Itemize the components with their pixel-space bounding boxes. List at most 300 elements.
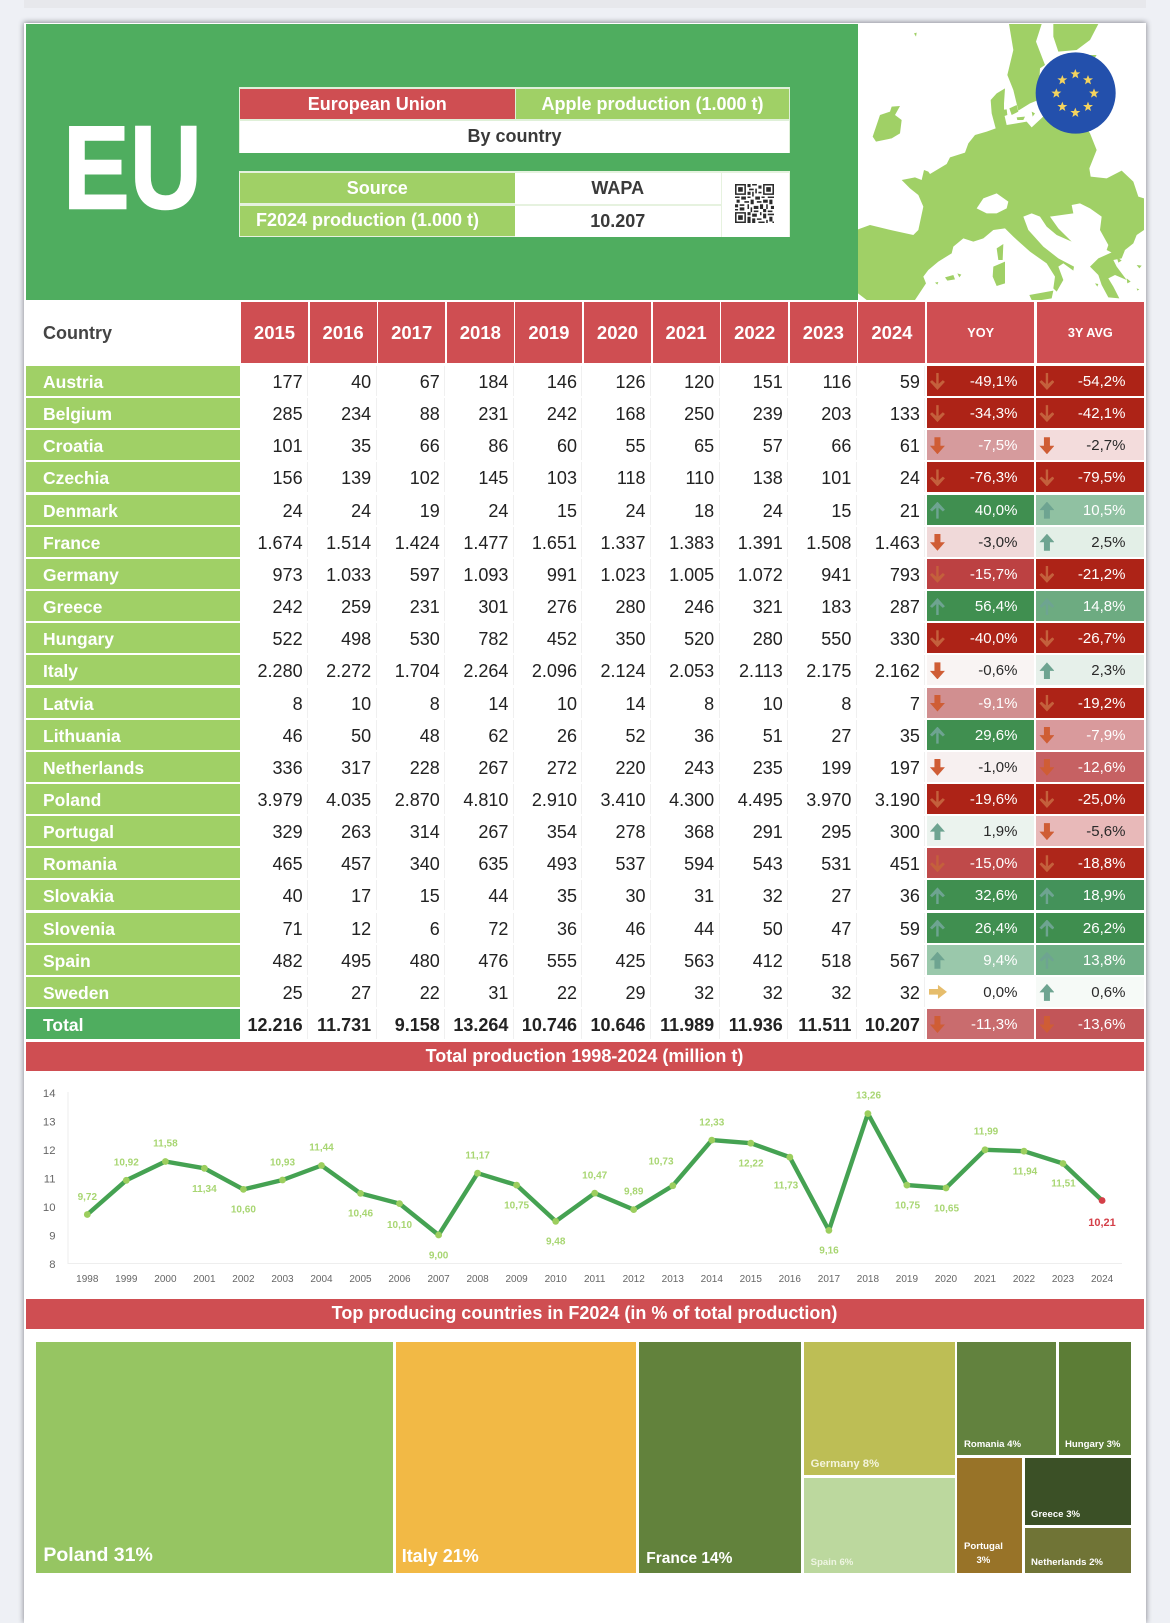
row: Denmark [26,495,1144,525]
3Y Total [1036,1009,1144,1039]
row: Czechia: 110 [685,468,714,488]
row: Belgium: 234 [341,404,371,424]
row: Austria: 146 [547,372,577,392]
x axis year labels: 2018 [857,1274,879,1285]
row: Total: 9.158 [395,1015,440,1035]
YOY Belgium [927,398,1034,428]
value: 10.207 [515,206,720,236]
tile: Portugal [957,1458,1022,1573]
3Y Czechia: -79,5% [1078,469,1125,486]
row: Croatia: 65 [694,436,714,456]
row: Greece: 246 [684,597,714,617]
icon: QR code [735,184,774,223]
row: France: 1.337 [601,533,646,553]
row: Lithuania: Lithuania [43,726,121,746]
row: Netherlands: 267 [478,758,508,778]
row: Sweden: 32 [900,983,920,1003]
label: Source: Source [347,178,408,198]
row: Sweden: 29 [626,983,646,1003]
3Y France: 2,5% [1091,534,1125,551]
YOY Latvia: -9,1% [978,694,1017,712]
table header: 2022 [721,302,788,363]
tile: Spain [804,1478,955,1573]
heading: Total production [26,1042,1144,1071]
YOY Belgium: -34,3% [970,405,1017,422]
table header: 2021 [653,302,720,363]
x axis year labels: 2005 [349,1274,372,1285]
table header: 2015 [241,302,308,363]
YOY Poland: -19,6% [970,791,1017,808]
3Y Romania [1036,848,1144,878]
label: Source [240,173,514,203]
heading: Top producing countries: Top producing countries in F2024 (in % of total production) [332,1303,837,1323]
row: Hungary: 452 [547,629,577,649]
row: Czechia: 24 [900,468,920,488]
x axis year labels: 1999 [115,1274,138,1285]
YOY Slovakia: 32,6% [975,887,1017,904]
3Y Germany: -21,2% [1078,566,1125,583]
row: Lithuania: 35 [900,726,920,746]
QR code cell [722,173,789,236]
row: Italy: 2.280 [258,661,303,681]
x axis year labels: 2010 [545,1274,567,1285]
row: Poland: 4.300 [669,790,714,810]
row: Sweden [26,977,1144,1007]
row: Slovakia: 17 [351,886,371,906]
row: Denmark: 24 [488,501,508,521]
row: Lithuania: 48 [420,726,440,746]
row: Slovakia: 44 [488,886,508,906]
table header: 2016 [310,302,377,363]
row: Greece: 276 [547,597,577,617]
YOY Total: -11,3% [971,1016,1017,1033]
table header: 2019: 2019 [528,322,569,342]
row: Netherlands: 235 [753,758,783,778]
x axis year labels: 2016 [779,1274,801,1285]
heading: By country [240,120,789,152]
table header: Country: Country [43,323,112,343]
YOY Austria [927,366,1034,396]
row: Austria: 151 [753,372,783,392]
row: Slovakia: 32 [763,886,783,906]
data labels: 11,73 [774,1180,799,1192]
row: Sweden: 32 [831,983,851,1003]
row: Netherlands: 336 [273,758,303,778]
3Y Spain [1036,945,1144,975]
row: Romania: 594 [684,854,714,874]
row: Latvia: 8 [704,694,714,714]
row: Spain [26,945,1144,975]
heading: Total production: Total production 1998-2024 (million t) [426,1046,743,1066]
row: Poland: 2.870 [395,790,440,810]
YOY Portugal: 1,9% [983,823,1017,840]
row: Romania: 493 [547,854,577,874]
x axis year labels: 2000 [154,1274,177,1285]
table header: 2024 [858,302,925,363]
table header: 2020 [584,302,651,363]
row: Hungary: 520 [684,629,714,649]
row: Total: 11.936 [729,1015,783,1035]
row: Sweden: Sweden [43,983,109,1003]
row: Denmark: 19 [420,501,440,521]
row: Slovenia: 46 [626,919,646,939]
table header: 2016: 2016 [323,322,364,342]
row: Spain: 412 [753,951,783,971]
row: Slovakia [26,880,1144,910]
map of Europe with EU flag [858,24,1144,300]
table header: YOY [927,302,1034,363]
tile: Hungary: Hungary 3% [1065,1439,1120,1450]
tile: Romania: Romania 4% [964,1439,1021,1450]
row: Portugal: 368 [684,822,714,842]
data labels: 10,47 [582,1170,608,1182]
row: Spain: 518 [821,951,851,971]
row: Portugal [26,816,1144,846]
3Y Hungary [1036,623,1144,653]
YOY Greece: 56,4% [975,598,1017,615]
row: Romania: 465 [273,854,303,874]
3Y Slovenia: 26,2% [1083,920,1125,937]
row: Sweden: 27 [351,983,371,1003]
row: Netherlands [26,752,1144,782]
3Y Denmark: 10,5% [1083,502,1125,519]
row: Total: 10.207 [865,1015,920,1035]
row: Romania: 451 [890,854,920,874]
row: Romania: 457 [341,854,371,874]
row: Belgium: 285 [273,404,303,424]
value: WAPA: WAPA [591,178,644,198]
treemap: top producing countries [36,1342,1131,1573]
table header: 2020: 2020 [597,322,638,342]
row: Netherlands: Netherlands [43,758,144,778]
3Y Belgium: -42,1% [1078,405,1125,422]
row: Germany: 1.072 [738,565,783,585]
row: Slovenia: 59 [900,919,920,939]
row: Spain: 482 [273,951,303,971]
row: Italy: 2.053 [669,661,714,681]
row: France: 1.477 [463,533,508,553]
data labels: 10,75 [504,1200,530,1212]
x axis year labels: 2013 [662,1274,684,1285]
row: Latvia: 8 [430,694,440,714]
3Y Poland [1036,784,1144,814]
y axis labels: 12 [43,1145,56,1157]
row: Italy: Italy [43,661,78,681]
YOY Slovenia: 26,4% [975,920,1017,937]
YOY Denmark: 40,0% [975,502,1017,519]
row: Slovakia: 36 [900,886,920,906]
row: Netherlands: 243 [684,758,714,778]
row: Total: 10.746 [522,1015,577,1035]
data labels: 9,48 [546,1236,566,1248]
icon: EU flag [1036,52,1116,134]
row: Austria: 40 [351,372,371,392]
heading: By country: By country [467,126,562,146]
3Y Belgium [1036,398,1144,428]
map: Ireland [873,106,902,142]
YOY Czechia: -76,3% [970,469,1017,486]
row: Austria: 184 [478,372,508,392]
row: Spain: 555 [547,951,577,971]
table header: 2023 [790,302,857,363]
x axis year labels: 2008 [466,1274,489,1285]
3Y Italy [1036,655,1144,685]
row: Slovenia: 44 [694,919,714,939]
row: Spain: 567 [890,951,920,971]
row: Denmark: 15 [557,501,577,521]
row: Denmark: 24 [763,501,783,521]
data labels: 11,58 [153,1138,178,1150]
3Y Denmark [1036,495,1144,525]
row: Latvia: 8 [841,694,851,714]
row: France: 1.651 [532,533,577,553]
map: Sweden [1007,24,1045,111]
YOY Germany: -15,7% [970,566,1017,583]
row: Sweden: 22 [557,983,577,1003]
row: Hungary: 280 [753,629,783,649]
data labels: 10,92 [114,1158,139,1168]
data labels: 11,99 [974,1126,999,1138]
row: Croatia: 57 [763,436,783,456]
row: Portugal: Portugal [43,822,114,842]
row: Slovenia: 6 [430,919,440,939]
row: Slovenia: 36 [557,919,577,939]
row: Italy: 2.272 [326,661,371,681]
table header: 2019 [515,302,582,363]
row: Romania: 537 [616,854,646,874]
heading: Top producing countries [26,1299,1144,1329]
row: Greece: Greece [43,597,102,617]
row: Slovakia: Slovakia [43,886,114,906]
row: Poland [26,784,1144,814]
row: Slovenia: 47 [831,919,851,939]
row: Greece [26,591,1144,621]
row: Denmark: Denmark [43,501,118,521]
row: Czechia: 103 [547,468,577,488]
y axis labels: 9 [49,1230,56,1242]
x axis year labels: 2015 [740,1274,762,1285]
YOY France: -3,0% [978,534,1017,551]
row: Greece: 287 [890,597,920,617]
row: Portugal: 295 [821,822,851,842]
row: Germany: Germany [43,565,119,585]
data labels: 9,72 [78,1192,97,1203]
row: Germany: 1.033 [326,565,371,585]
row: Belgium: 250 [684,404,714,424]
row: Total: 11.511 [798,1015,851,1035]
tile: Greece [1025,1458,1131,1525]
row: Austria: Austria [43,372,103,392]
table header: 2024: 2024 [871,322,912,342]
row: Romania: 543 [753,854,783,874]
YOY Netherlands: -1,0% [978,759,1017,776]
panel: report heading box [239,87,790,153]
table header: 2015: 2015 [254,322,295,342]
row: Denmark: 24 [351,501,371,521]
row: Total: 12.216 [248,1015,303,1035]
row: Hungary: Hungary [43,629,114,649]
map: Sicily [1029,291,1053,300]
tile: France: France 14% [646,1550,732,1567]
row: France [26,527,1144,557]
row: Italy: 1.704 [395,661,440,681]
3Y Lithuania: -7,9% [1086,727,1125,744]
row: Czechia: 156 [273,468,303,488]
YOY Austria: -49,1% [970,373,1017,390]
row: Croatia: 61 [900,436,920,456]
row: Belgium: 88 [420,404,440,424]
YOY Spain: 9,4% [983,952,1017,969]
label: F2024 production [240,206,514,236]
YOY Netherlands [927,752,1034,782]
row: Lithuania: 46 [283,726,303,746]
row: Poland: 3.190 [875,790,920,810]
x axis year labels: 2007 [427,1274,450,1285]
data labels: 9,89 [624,1186,644,1198]
chart axes [68,1092,1122,1264]
data labels: 10,21 [1088,1217,1116,1229]
row: Italy: 2.096 [532,661,577,681]
data labels: 11,17 [465,1150,490,1162]
table header: YOY: YOY [967,326,994,340]
row: Italy: 2.113 [739,661,783,681]
row: Greece: 259 [341,597,371,617]
row: Latvia: 7 [910,694,920,714]
row: Lithuania [26,720,1144,750]
heading: Apple production [516,89,789,119]
3Y Slovakia [1036,880,1144,910]
data labels: 11,44 [309,1142,334,1154]
row: Sweden: 25 [283,983,303,1003]
row: Greece: 183 [821,597,851,617]
YOY Lithuania [927,720,1034,750]
3Y Netherlands [1036,752,1144,782]
3Y Greece: 14,8% [1083,598,1125,615]
tile: Germany [804,1342,955,1475]
row: Denmark: 24 [283,501,303,521]
x axis year labels: 1998 [76,1274,99,1285]
row: Croatia: 60 [557,436,577,456]
data labels: 9,16 [819,1246,839,1256]
row: Germany: 597 [410,565,440,585]
3Y Portugal [1036,816,1144,846]
row: Sweden: 32 [694,983,714,1003]
row: Belgium: Belgium [43,404,112,424]
row: Hungary: 782 [478,629,508,649]
row: Lithuania: 52 [626,726,646,746]
value: 10.207: 10.207 [590,210,645,230]
row: Slovakia: 15 [420,886,440,906]
3Y Lithuania [1036,720,1144,750]
row: Italy: 2.162 [875,661,920,681]
x axis year labels [76,1274,1114,1285]
heading: Apple production: Apple production (1.000 t) [541,94,764,114]
row: Belgium: 168 [616,404,646,424]
tile: Hungary [1059,1342,1131,1455]
y axis labels: 14 [43,1088,56,1100]
3Y Latvia [1036,688,1144,718]
YOY Croatia [927,430,1034,460]
x axis year labels: 2012 [623,1274,645,1285]
row: Slovakia: 31 [694,886,714,906]
row: Italy [26,655,1144,685]
row: Spain: 563 [684,951,714,971]
data labels: 11,94 [1013,1166,1038,1178]
row: Germany: 1.005 [669,565,714,585]
row: Spain: Spain [43,951,91,971]
row: Czechia: 145 [478,468,508,488]
3Y Spain: 13,8% [1083,952,1125,969]
3Y Hungary: -26,7% [1078,630,1125,647]
3Y Poland: -25,0% [1078,791,1125,808]
data labels: 13,26 [856,1090,881,1102]
map: Balearic and Aegean islands [914,33,1142,291]
row: Spain: 476 [478,951,508,971]
3Y Slovenia [1036,913,1144,943]
row: Latvia [26,688,1144,718]
3Y Slovakia: 18,9% [1083,887,1125,904]
row: Hungary: 330 [890,629,920,649]
tile: Italy: Italy 21% [402,1546,479,1566]
row: Lithuania: 26 [557,726,577,746]
row: Lithuania: 36 [694,726,714,746]
row: France: 1.674 [258,533,303,553]
YOY Germany [927,559,1034,589]
row: Austria: 116 [823,372,851,392]
row: Portugal: 354 [547,822,577,842]
row: Portugal: 263 [341,822,371,842]
row: France: 1.508 [806,533,851,553]
row: Austria: 67 [420,372,440,392]
row: Sweden: 22 [420,983,440,1003]
3Y Portugal: -5,6% [1086,823,1125,840]
YOY Lithuania: 29,6% [975,727,1017,744]
row: Total [26,1009,1144,1039]
tile: Poland [36,1342,393,1573]
row: Netherlands: 199 [821,758,851,778]
row: Lithuania: 27 [831,726,851,746]
row: Czechia: 101 [821,468,851,488]
3Y Sweden [1036,977,1144,1007]
row: Croatia: 66 [831,436,851,456]
YOY Italy: -0,6% [978,662,1017,679]
row: Italy: 2.124 [601,661,646,681]
data labels: 10,60 [231,1204,256,1216]
row: Belgium: 231 [478,404,508,424]
row: Croatia: 55 [626,436,646,456]
row: Croatia: 86 [488,436,508,456]
x axis year labels: 2022 [1013,1274,1036,1285]
y axis labels: 10 [43,1202,56,1214]
table header: 2017: 2017 [391,322,432,342]
tile: Italy [396,1342,636,1573]
3Y Sweden: 0,6% [1091,984,1125,1001]
x axis year labels: 2009 [505,1274,528,1285]
data labels: 10,93 [270,1158,295,1168]
row: Belgium: 203 [821,404,851,424]
row: Total: 11.731 [317,1015,371,1035]
row: Spain: 480 [410,951,440,971]
y axis labels: 11 [44,1174,56,1186]
row: Denmark: 21 [900,501,920,521]
tile: Poland: Poland 31% [43,1544,153,1566]
tile: Romania [957,1342,1056,1455]
YOY Romania: -15,0% [970,855,1017,872]
row: Germany: 941 [821,565,851,585]
row: Germany [26,559,1144,589]
x axis year labels: 2023 [1052,1274,1075,1285]
row: Sweden: 32 [763,983,783,1003]
